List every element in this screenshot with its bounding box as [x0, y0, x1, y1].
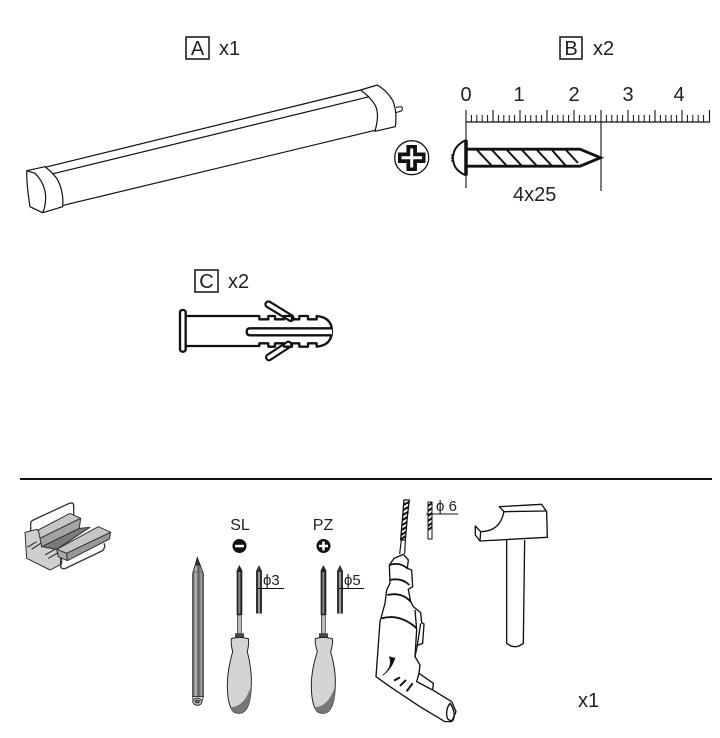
label C x2: C [199, 271, 214, 293]
label A x1 [186, 37, 240, 60]
ruler numbers: 4 [673, 84, 685, 106]
part A: light tube [27, 85, 402, 213]
tool: pencil [193, 558, 203, 705]
tool: SL screwdriver [227, 565, 251, 713]
tool: PZ screwdriver [311, 565, 335, 713]
part B: screw [451, 140, 600, 176]
label A x1: A [191, 38, 205, 60]
drill bit diameter [426, 498, 458, 539]
label C x2 [195, 270, 249, 293]
SL label and icon: SL [230, 517, 250, 534]
screw size label: 4x25 [513, 184, 556, 206]
tool: mitre box [25, 503, 111, 570]
icon: cross head [395, 141, 429, 175]
PZ bit diameter [337, 565, 364, 614]
divider [20, 478, 712, 480]
label B x2: B [564, 38, 578, 60]
ruler numbers: 1 [513, 84, 525, 106]
label B x2: x2 [593, 38, 614, 60]
SL bit diameter: ϕ3 [263, 572, 280, 589]
PZ label and icon [313, 517, 333, 553]
ruler numbers: 0 [460, 84, 472, 106]
ruler numbers [460, 84, 685, 106]
tool: hammer [475, 504, 547, 647]
quantity for tools: x1 [578, 690, 599, 712]
ruler numbers: 3 [622, 84, 634, 106]
label B x2 [560, 37, 614, 60]
part C: wall plug [180, 304, 332, 357]
tool: drill [376, 500, 456, 722]
PZ label and icon: PZ [313, 517, 333, 534]
SL bit diameter [256, 565, 284, 614]
PZ bit diameter: ϕ5 [344, 572, 361, 589]
drill bit diameter: ϕ 6 [436, 498, 457, 515]
SL label and icon [230, 517, 250, 553]
ruler numbers: 2 [568, 84, 580, 106]
label C x2: x2 [228, 271, 249, 293]
ruler [466, 110, 710, 191]
label A x1: x1 [219, 38, 240, 60]
